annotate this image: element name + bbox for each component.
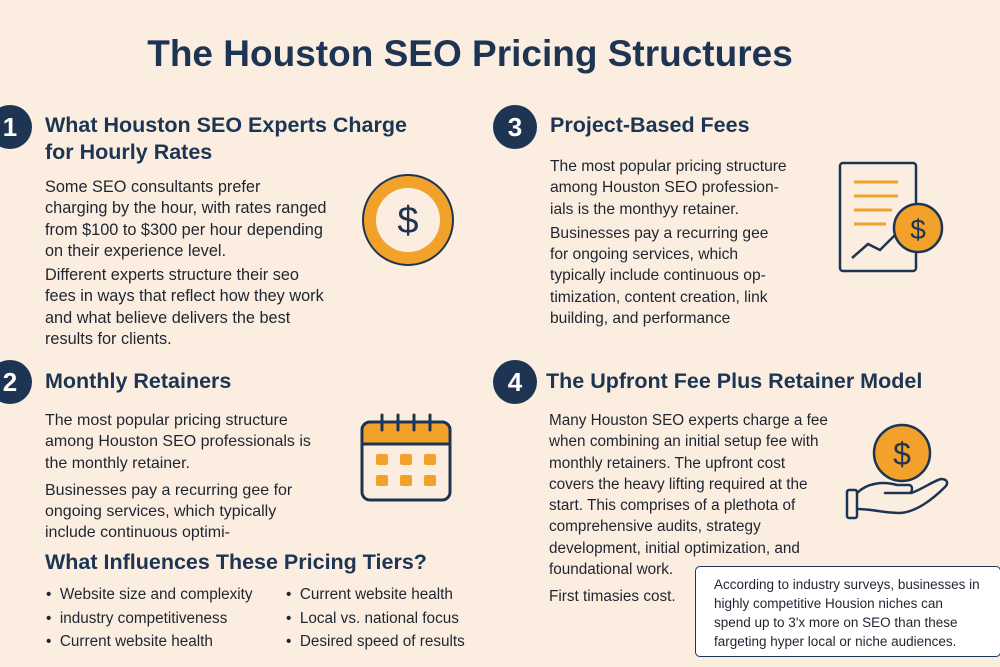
text 1: Some SEO consultants prefer [45,178,260,196]
icon: report with coin [838,162,944,272]
text 3: among Houston SEO profession- [550,179,779,196]
list left: • Website size and complexity [46,586,253,603]
heading 1: What Houston SEO Experts Charge [45,113,407,137]
text 1: from $100 to $300 per hour depending [45,221,323,239]
list right: • Desired speed of results [286,633,465,650]
text 1: charging by the hour, with rates ranged [45,199,326,217]
text 2: include continuous optimi- [45,524,230,541]
text 3: typically include continuous op- [550,267,766,284]
heading 2: Monthly Retainers [45,369,231,393]
text 2: The most popular pricing structure [45,412,288,429]
icon: calendar [360,414,452,502]
number 1: 1 [3,112,17,142]
panel: influences [45,550,465,650]
list left: • Current website health [46,633,213,650]
text 4: foundational work. First timasies cost. [549,561,676,605]
number 2: 2 [3,367,17,397]
text 1 [45,178,326,348]
text 4 [549,412,828,605]
list right: • Local vs. national focus [286,610,459,626]
number 4 [493,360,537,404]
callout: highly competitive Housion niches can [714,596,943,611]
list right: • Current website health [286,586,453,603]
text 3 [550,158,787,327]
heading influences: What Influences These Pricing Tiers? [45,550,427,574]
text 4: Many Houston SEO experts charge a fee [549,412,828,429]
text 3: The most popular pricing structure [550,158,787,175]
text 3: for ongoing services, which [550,246,738,263]
icon: hand with coin: $ [893,436,911,472]
text 4: comprehensive audits, strategy [549,518,761,535]
heading 3: Project-Based Fees [550,113,750,137]
number 3: 3 [508,112,522,142]
list right [286,586,465,650]
text 1: fees in ways that reflect how they work [45,287,324,305]
panel: hourly rates [0,105,454,348]
icon: report with coin: $ [910,214,926,245]
title: The Houston SEO Pricing Structures [147,33,793,74]
list left [46,586,253,650]
text 4: start. This comprises of a plethota of [549,497,795,514]
text 4: development, initial optimization, and [549,540,800,557]
heading 1: for Hourly Rates [45,140,212,164]
number 2 [0,360,32,404]
icon: dollar coin: $ [397,200,419,242]
heading 1 [45,113,407,164]
number 3 [493,105,537,149]
text 3: timization, content creation, link [550,289,768,306]
callout: fargeting hyper local or niche audiences. [714,634,956,649]
callout [695,566,1000,657]
text 4: covers the heavy lifting required at the [549,476,808,493]
text 2: the monthly retainer. Businesses pay a recurring gee for [45,455,292,499]
text 2: ongoing services, which typically [45,503,276,520]
panel: upfront plus retainer [493,360,948,605]
text 4: when combining an initial setup fee with [549,433,819,450]
text 1: and what believe delivers the best [45,309,290,327]
text 1: on their experience level. Different experts structure their seo [45,242,299,284]
list left: • industry competitiveness [46,610,227,626]
heading 4: The Upfront Fee Plus Retainer Model [546,369,922,393]
panel: project-based [493,105,944,327]
text 3: ials is the monthyy retainer. Businesses pay a recurring gee [550,201,768,242]
text 2 [45,412,311,541]
text 1: results for clients. [45,330,172,348]
text 4: monthly retainers. The upfront cost [549,455,785,472]
icon: hand with coin [846,424,948,520]
number 4: 4 [508,367,522,397]
panel: monthly retainers [0,360,452,541]
text 2: among Houston SEO professionals is [45,433,311,450]
text 3: building, and performance [550,310,730,327]
number 1 [0,105,32,149]
callout: spend up to 3'x more on SEO than these [714,615,957,630]
icon: dollar coin [362,174,454,266]
callout: According to industry surveys, businesses in [714,577,980,592]
